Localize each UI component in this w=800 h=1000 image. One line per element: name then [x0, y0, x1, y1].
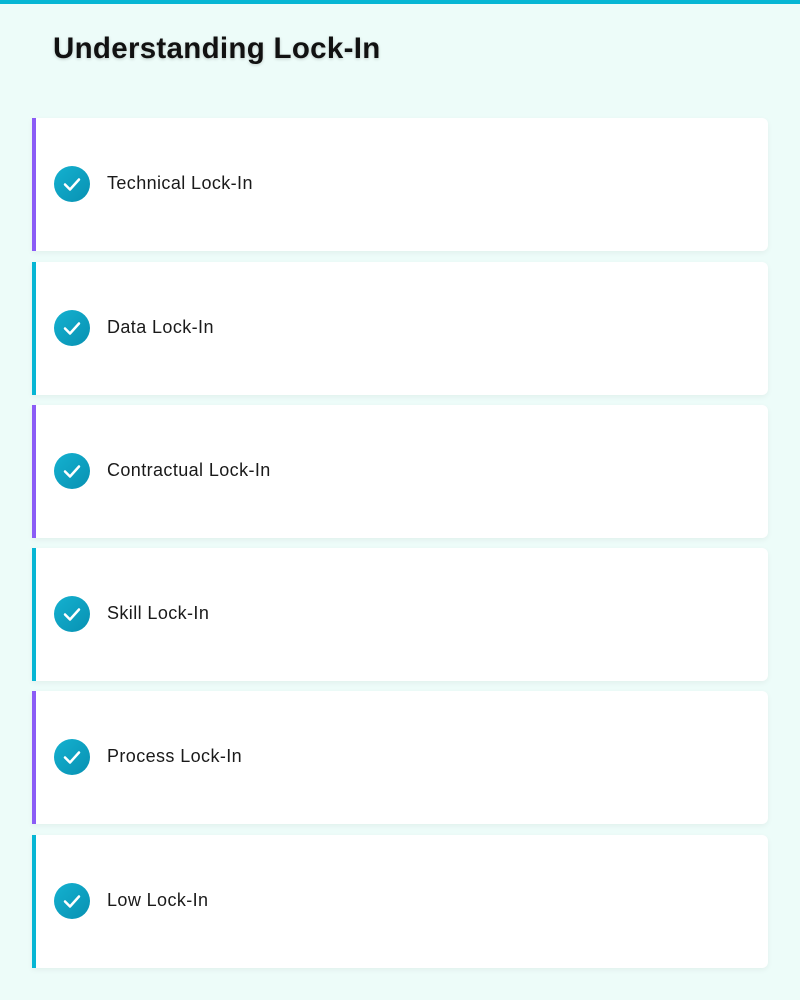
label: Skill Lock-In	[107, 603, 209, 623]
card: contractual	[32, 405, 768, 538]
icon: check	[54, 596, 90, 632]
icon: check	[54, 883, 90, 919]
icon: check	[54, 453, 90, 489]
card: low	[32, 835, 768, 968]
card: data	[32, 262, 768, 395]
icon: check	[54, 166, 90, 202]
label: Process Lock-In	[107, 746, 242, 766]
label: Data Lock-In	[107, 317, 214, 337]
label: Low Lock-In	[107, 890, 208, 910]
icon: check	[54, 739, 90, 775]
label: Technical Lock-In	[107, 173, 253, 193]
icon: check	[54, 310, 90, 346]
label: Contractual Lock-In	[107, 460, 271, 480]
card: process	[32, 691, 768, 824]
card: technical	[32, 118, 768, 251]
card: skill	[32, 548, 768, 681]
title: Understanding Lock-In	[53, 32, 381, 65]
